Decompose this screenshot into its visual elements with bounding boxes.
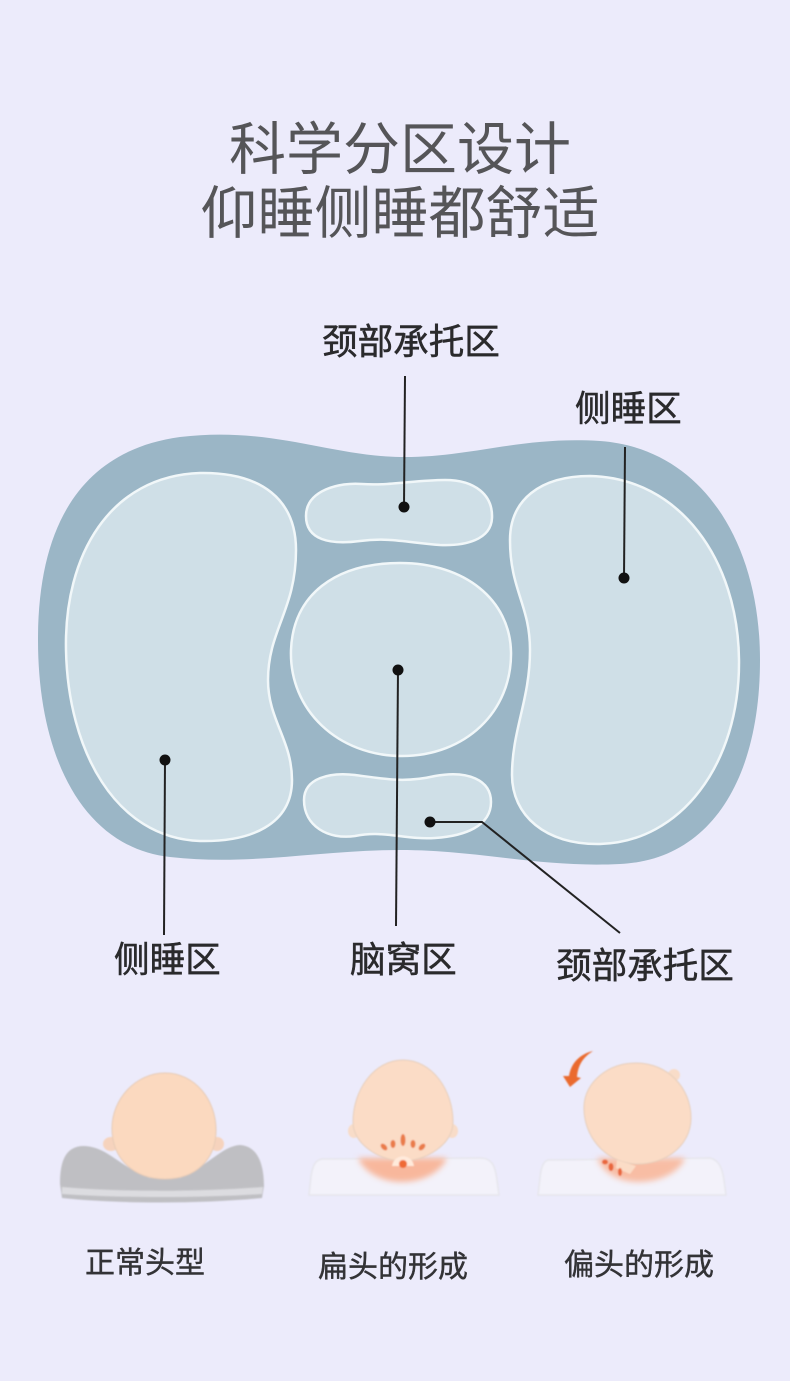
label: top neck support: 颈部承托区 (322, 322, 500, 362)
zone: left side sleep (66, 473, 296, 841)
leader: bottom neck support (424, 816, 620, 933)
caption: skewed head: 偏头的形成 (564, 1249, 714, 1282)
leader: top neck support (398, 376, 410, 512)
leader: right side sleep (618, 447, 630, 584)
icon: curved orange arrow (563, 1051, 593, 1087)
label: bottom neck support: 颈部承托区 (556, 946, 734, 986)
illustration: skewed head formation (538, 1063, 726, 1195)
illustration: flat head formation (309, 1060, 499, 1195)
zone: right side sleep (510, 476, 739, 844)
caption: flat head: 扁头的形成 (318, 1251, 468, 1284)
illustration: normal head shape (60, 1073, 264, 1202)
zone: top neck support (306, 480, 492, 545)
caption: normal head shape: 正常头型 (85, 1247, 205, 1280)
leader: left side sleep (160, 754, 170, 935)
title: 仰睡侧睡都舒适 (200, 182, 600, 246)
label: right side sleep: 侧睡区 (575, 389, 682, 429)
label: left side sleep: 侧睡区 (114, 940, 221, 980)
leader: head cradle (392, 664, 404, 926)
zone: bottom neck support (304, 774, 491, 838)
zone: head cradle (291, 563, 511, 756)
title (200, 118, 600, 246)
label: head cradle: 脑窝区 (350, 940, 457, 980)
title: 科学分区设计 (229, 118, 571, 182)
pillow outline (38, 435, 760, 865)
